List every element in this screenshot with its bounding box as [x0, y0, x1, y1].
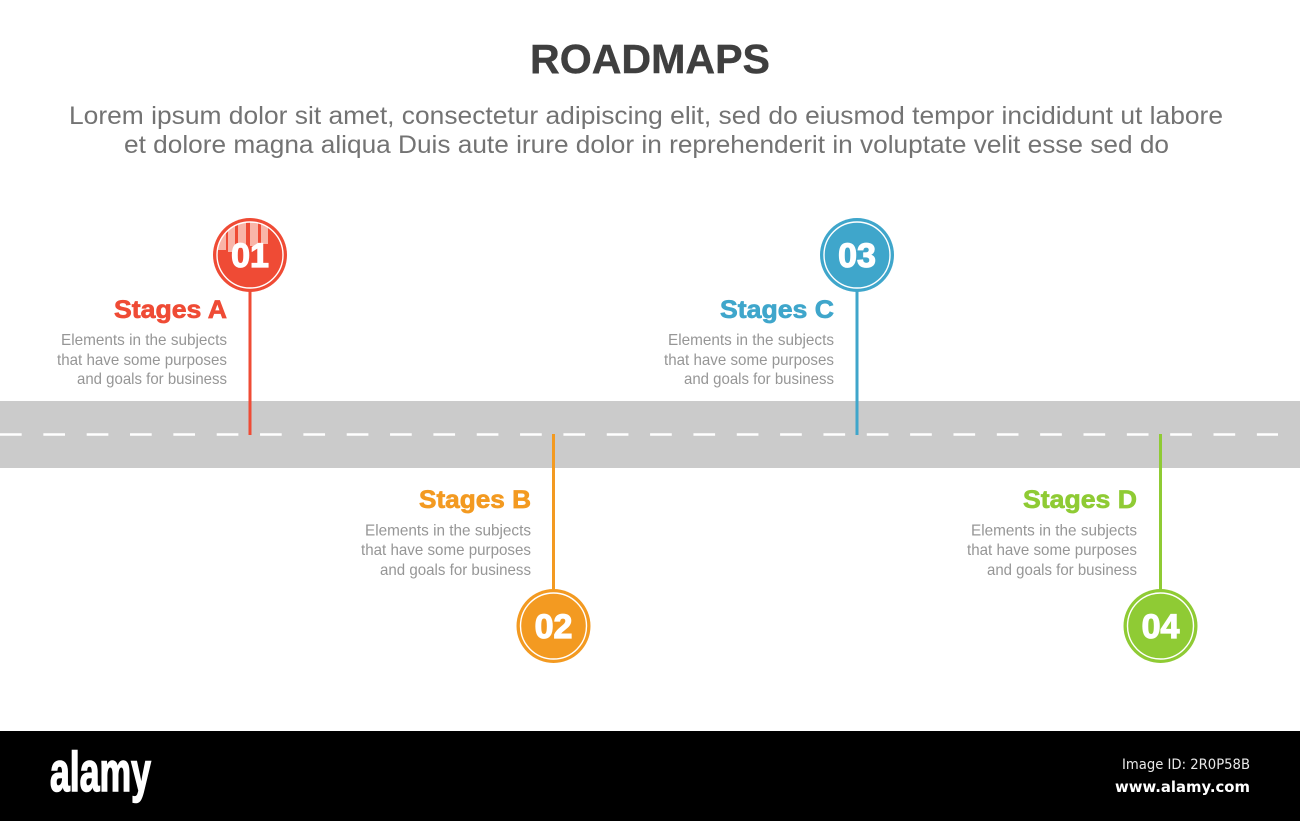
alamy logo: alamy [50, 740, 151, 803]
connector line C [856, 290, 858, 435]
heading A: Stages A [114, 296, 227, 324]
description B: that have some purposes [361, 542, 531, 559]
number badge 01: 01 [231, 237, 269, 275]
stage 02: Stages B [361, 434, 590, 663]
heading D: Stages D [1023, 486, 1137, 514]
description D [967, 522, 1137, 579]
description A: Elements in the subjects [61, 332, 227, 349]
description C: Elements in the subjects [668, 332, 834, 349]
stage 01: Stages A [57, 218, 287, 435]
number badge 02: 02 [535, 608, 572, 646]
description A: and goals for business [77, 371, 227, 388]
heading C: Stages C [720, 296, 834, 324]
stage 03: Stages C [664, 218, 894, 435]
connector line B [552, 434, 555, 592]
footer bar [0, 731, 1300, 821]
description B: Elements in the subjects [365, 522, 531, 540]
number badge 02 [516, 589, 590, 663]
subtitle text block: et dolore magna aliqua Duis aute irure dolor in reprehenderit in voluptate velit esse sed do [124, 131, 1169, 159]
connector line D [1159, 434, 1162, 592]
description D: and goals for business [987, 562, 1137, 579]
subtitle text block: Lorem ipsum dolor sit amet, consectetur adipiscing elit, sed do eiusmod tempor incididunt ut labore [69, 102, 1223, 130]
road [0, 401, 1300, 468]
title: ROADMAPS [530, 36, 770, 82]
number badge 04: 04 [1142, 608, 1179, 646]
number badge 03: 03 [838, 237, 876, 275]
number badge 03 [820, 218, 894, 292]
description D: Elements in the subjects [971, 522, 1137, 540]
description A: that have some purposes [57, 352, 227, 369]
number badge 01 [213, 218, 287, 292]
image id: Image ID: 2R0P58B [1122, 757, 1250, 773]
description D: that have some purposes [967, 542, 1137, 559]
connector line A [248, 290, 252, 435]
description C [664, 332, 834, 388]
number badge 04 [1124, 589, 1198, 663]
description B [361, 522, 531, 579]
heading B: Stages B [419, 486, 531, 514]
description C: and goals for business [684, 371, 834, 388]
subtitle text block [69, 102, 1223, 159]
description C: that have some purposes [664, 352, 834, 369]
description B: and goals for business [380, 562, 531, 579]
description A [57, 332, 227, 388]
website: www.alamy.com [1115, 778, 1250, 796]
stage 04: Stages D [967, 434, 1198, 663]
